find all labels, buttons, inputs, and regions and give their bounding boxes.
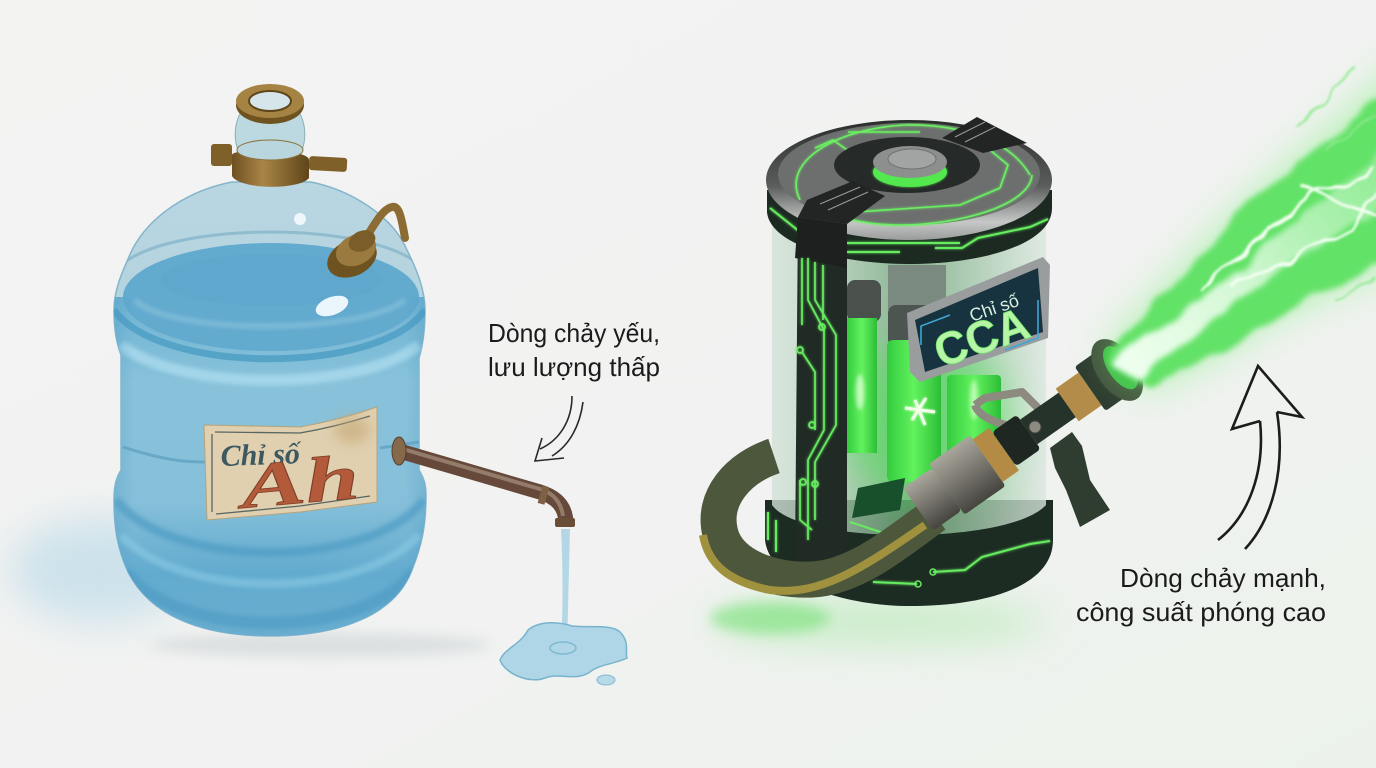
bottle shadow <box>10 518 490 657</box>
hose <box>703 456 935 591</box>
green cells inside <box>840 265 1010 540</box>
water puddle <box>500 623 627 685</box>
coupling and nozzle <box>898 330 1154 538</box>
cap circuit traces <box>796 125 1032 225</box>
caption: strong flow: công suất phóng cao <box>1076 597 1326 627</box>
vertical circuit strap <box>795 217 847 561</box>
caption: weak flow: Dòng chảy yếu, <box>488 318 660 348</box>
CCA plaque <box>907 257 1050 382</box>
arrow: down toward tap <box>535 396 583 461</box>
label text: Ah: Ah <box>232 441 362 522</box>
thin water stream <box>561 529 570 648</box>
brass ring top <box>236 84 304 124</box>
battery base <box>765 500 1053 606</box>
green energy beam <box>1105 30 1376 390</box>
battery green floor glow <box>710 600 1050 644</box>
arrow: up toward beam <box>1218 366 1302 549</box>
caption: weak flow: lưu lượng thấp <box>488 352 660 382</box>
glass cylinder <box>772 200 1046 535</box>
center button <box>873 157 947 187</box>
band circuit lines <box>770 208 1048 252</box>
bottle glass body <box>114 182 426 636</box>
caption: strong flow: Dòng chảy mạnh, <box>1120 563 1326 593</box>
side valve with hook spout <box>321 207 405 285</box>
water bottle <box>100 84 627 685</box>
label text: Chỉ số: Chỉ số <box>220 437 302 473</box>
rusty pipe and tap <box>392 437 575 527</box>
plaque text: CCA: CCA <box>927 297 1036 377</box>
top cap <box>766 117 1052 240</box>
CCA battery <box>703 117 1154 606</box>
pistol grip <box>1050 432 1110 527</box>
water and glass reflections <box>100 213 440 642</box>
lower cap band <box>767 190 1052 264</box>
paper label <box>204 407 377 522</box>
brass collar and bolts <box>211 140 347 187</box>
straps across cap <box>798 181 885 224</box>
nozzle lever <box>975 392 1040 432</box>
lever pivot <box>1029 421 1041 433</box>
plaque text: Chỉ số: Chỉ số <box>967 290 1022 326</box>
neck <box>235 114 305 150</box>
